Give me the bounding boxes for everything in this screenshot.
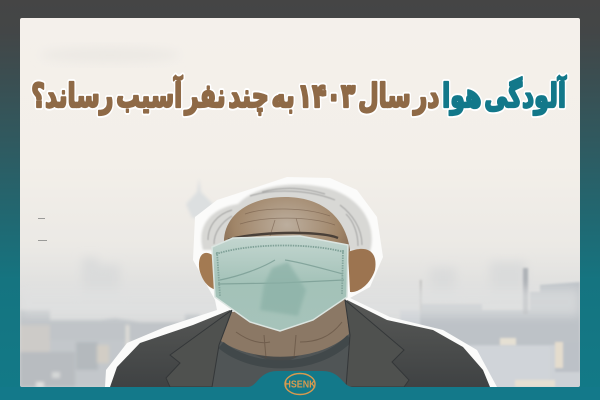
white cutout outline [105,177,497,387]
soft fog over the city [20,288,580,316]
figure: man wearing surgical mask [105,177,497,387]
mask pleats [218,260,344,284]
sweater collar [221,338,350,364]
title: آلودگی هوا در سال ۱۴۰۳ به چند نفر آسیب رساند؟ [31,75,567,115]
logo: HSENK: HSENK [284,380,316,390]
eyebrows [228,233,338,240]
mask [212,236,348,331]
hair [201,185,372,252]
head [224,197,350,290]
logo: HSENK [284,374,316,394]
title: آلودگی هوا در سال ۱۴۰۳ به چند نفر آسیب رساند؟ [31,75,567,115]
right ear [348,249,376,292]
jacket lapels [166,300,409,387]
bottom teal band [0,371,600,400]
distant hazy towers [85,260,522,280]
jacket [110,300,490,387]
sweater [212,332,350,387]
birds [38,218,47,241]
left skyline [20,310,200,387]
neck [221,296,349,357]
forehead wrinkles [240,209,335,236]
right skyline [400,268,580,387]
left ear [199,253,216,290]
mask stitched edge [216,245,344,254]
tehran tower silhouette [186,184,212,218]
neck wrinkles [236,322,342,358]
mask side seams [217,250,343,296]
mask nose shadow [260,262,306,316]
soft cloud band [40,47,180,63]
